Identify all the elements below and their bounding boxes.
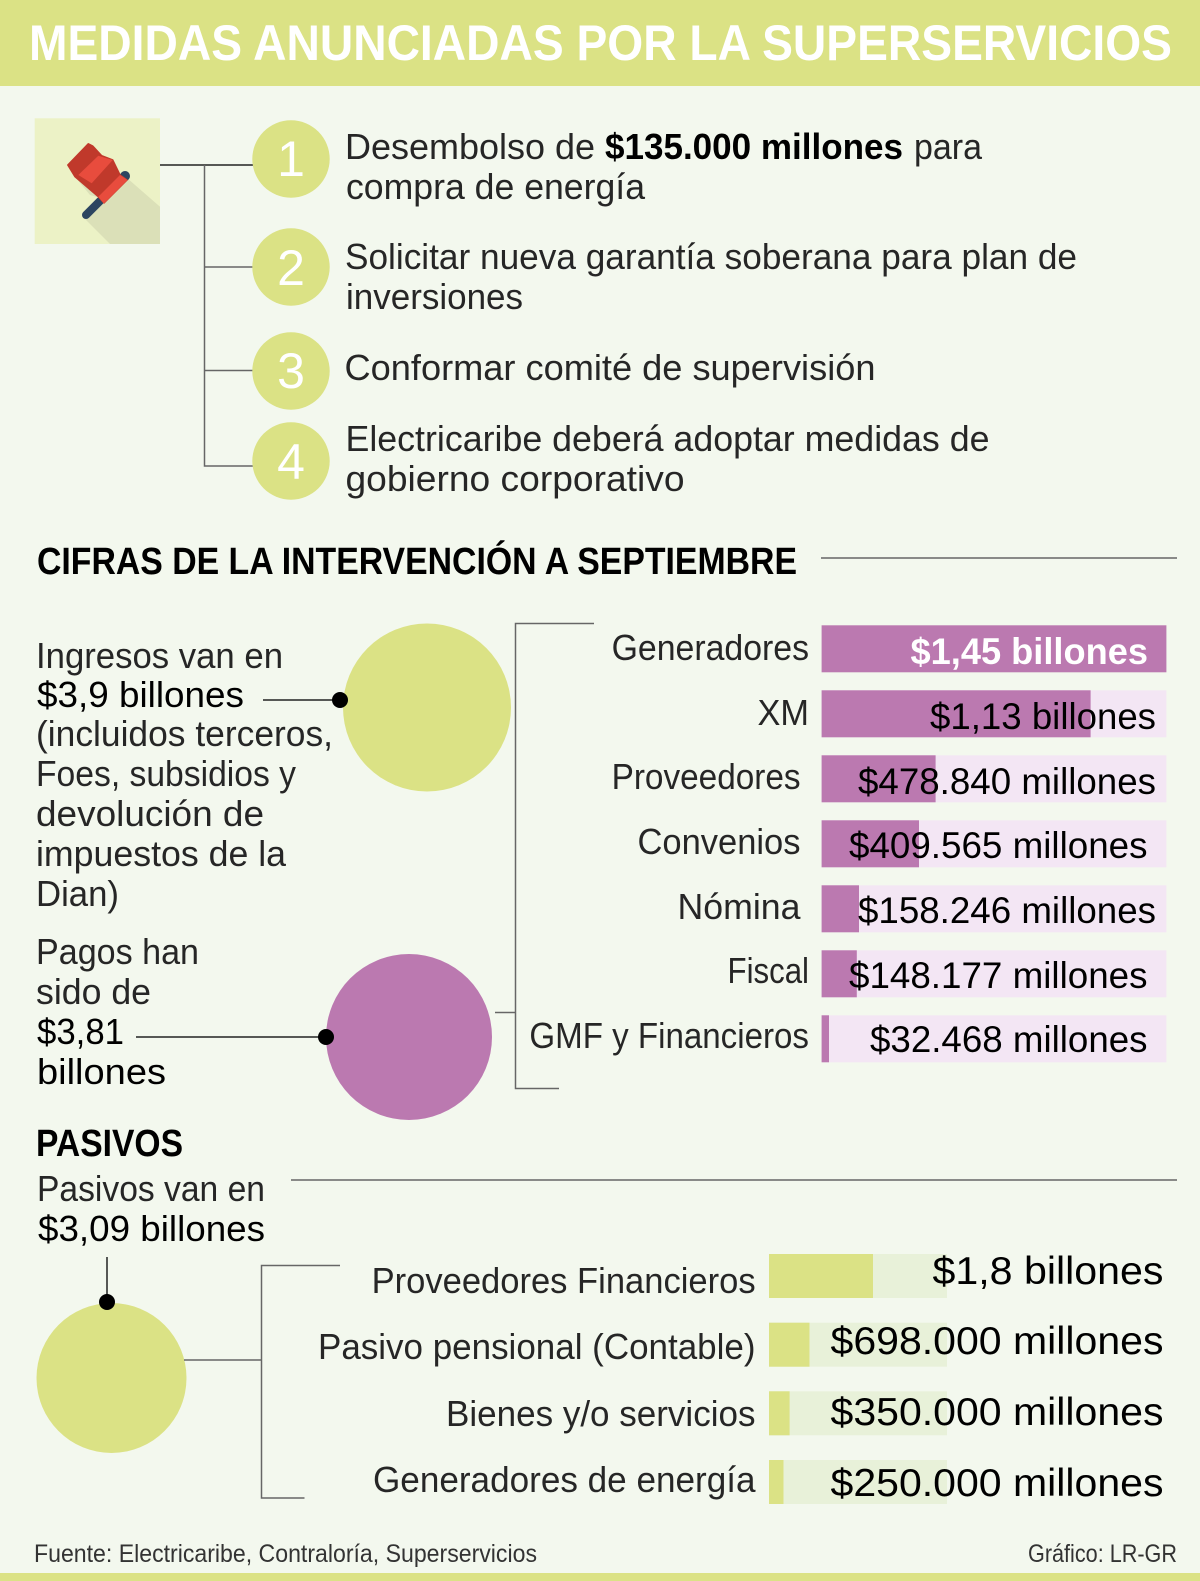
measure 4: gobierno corporativo	[346, 458, 684, 499]
liabilities circle	[36, 1257, 186, 1453]
bar: Pasivo pensional: $698.000 millones	[830, 1320, 1164, 1363]
bar: XM: XM	[758, 692, 809, 733]
bar chart: liabilities	[318, 1250, 1164, 1505]
income text block: $3,9 billones	[37, 674, 244, 715]
bar: Generadores: $1,45 billones	[910, 631, 1148, 672]
measure 4: Electricaribe deberá adoptar medidas de	[346, 418, 990, 459]
heading: pasivos: PASIVOS	[36, 1123, 183, 1165]
measure 2	[252, 228, 1077, 317]
liabilities text block: $3,09 billones	[38, 1208, 265, 1249]
bar: XM: $1,13 billones	[930, 696, 1156, 737]
bracket: liabilities	[184, 1266, 340, 1498]
measure 1: 1	[277, 131, 305, 187]
income text block: Foes, subsidios y	[36, 753, 296, 794]
bar: Proveedores: Proveedores	[612, 756, 801, 797]
income text block	[36, 635, 333, 914]
bar: Fiscal	[728, 950, 1166, 997]
bar: Proveedores Financieros	[372, 1250, 1164, 1301]
measure 1: $135.000 millones	[605, 126, 903, 167]
measure 2: Solicitar nueva garantía soberana para plan de	[345, 236, 1077, 277]
income text block: devolución de	[36, 793, 264, 834]
income text block: (incluidos terceros,	[36, 713, 333, 754]
liabilities text block: Pasivos van en	[37, 1168, 265, 1209]
bar: Nómina: Nómina	[678, 886, 801, 927]
measure 3: 3	[277, 343, 305, 399]
bracket: payments	[495, 624, 594, 1088]
bar: Proveedores Financieros: Proveedores Financieros	[372, 1260, 756, 1301]
measure 1: Desembolso de	[345, 126, 595, 167]
payments text block	[36, 931, 199, 1092]
bar: Generadores de energía: Generadores de energía	[373, 1459, 756, 1500]
bar: Proveedores	[612, 755, 1166, 802]
income circle	[263, 624, 511, 792]
measure 4: 4	[277, 434, 305, 490]
bar: Nómina	[678, 885, 1166, 932]
payments text block: $3,81	[37, 1011, 124, 1052]
footer band	[0, 1573, 1200, 1581]
bar: Fiscal: Fiscal	[728, 950, 809, 991]
bar: Proveedores Financieros: $1,8 billones	[932, 1250, 1164, 1293]
heading: cifras: CIFRAS DE LA INTERVENCIÓN A SEPTIEMBRE	[37, 539, 797, 583]
bar: Proveedores: $478.840 millones	[858, 761, 1156, 802]
measure 2: 2	[277, 240, 305, 296]
measure 1: compra de energía	[346, 166, 646, 207]
bar: Nómina: $158.246 millones	[858, 890, 1156, 931]
bar: Generadores: Generadores	[612, 627, 809, 668]
payments text block: Pagos han	[36, 931, 199, 972]
bar: Generadores de energía: $250.000 millones	[830, 1462, 1164, 1505]
connector lines: measures	[160, 165, 253, 466]
bar: GMF y Financieros	[529, 1015, 1166, 1062]
income text block: impuestos de la	[36, 833, 287, 874]
credit: Gráfico: LR-GR	[1028, 1540, 1177, 1568]
icon: red flag	[35, 118, 160, 244]
bar: Convenios	[638, 820, 1166, 867]
payments circle	[136, 954, 492, 1120]
liabilities text block	[37, 1168, 265, 1249]
bar: Generadores de energía	[373, 1459, 1164, 1505]
measure 3: Conformar comité de supervisión	[344, 347, 876, 388]
bar: GMF y Financieros: $32.468 millones	[870, 1019, 1148, 1060]
bar: Bienes y/o servicios: Bienes y/o servicios	[446, 1393, 756, 1434]
source note: Fuente: Electricaribe, Contraloría, Superservicios	[34, 1540, 537, 1568]
title banner	[0, 0, 1200, 86]
bar: GMF y Financieros: GMF y Financieros	[529, 1015, 809, 1056]
income text block: Dian)	[36, 873, 119, 914]
measure 3	[252, 332, 876, 410]
measure 1	[252, 120, 983, 207]
bar: Pasivo pensional: Pasivo pensional (Contable)	[318, 1326, 756, 1367]
measure 1: para	[914, 126, 983, 167]
bar chart: payments	[529, 625, 1166, 1062]
income text block: Ingresos van en	[36, 635, 283, 676]
bar: Convenios: $409.565 millones	[849, 825, 1148, 866]
measure 2: inversiones	[346, 276, 523, 317]
bar: Pasivo pensional	[318, 1320, 1164, 1367]
bar: Convenios: Convenios	[638, 821, 800, 862]
payments text block: sido de	[36, 971, 151, 1012]
bar: XM	[758, 690, 1166, 737]
measure 4	[252, 418, 990, 500]
payments text block: billones	[37, 1051, 166, 1092]
bar: Fiscal: $148.177 millones	[849, 955, 1148, 996]
bar: Generadores	[612, 625, 1166, 672]
bar: Bienes y/o servicios	[446, 1391, 1164, 1435]
bar: Bienes y/o servicios: $350.000 millones	[830, 1391, 1164, 1434]
